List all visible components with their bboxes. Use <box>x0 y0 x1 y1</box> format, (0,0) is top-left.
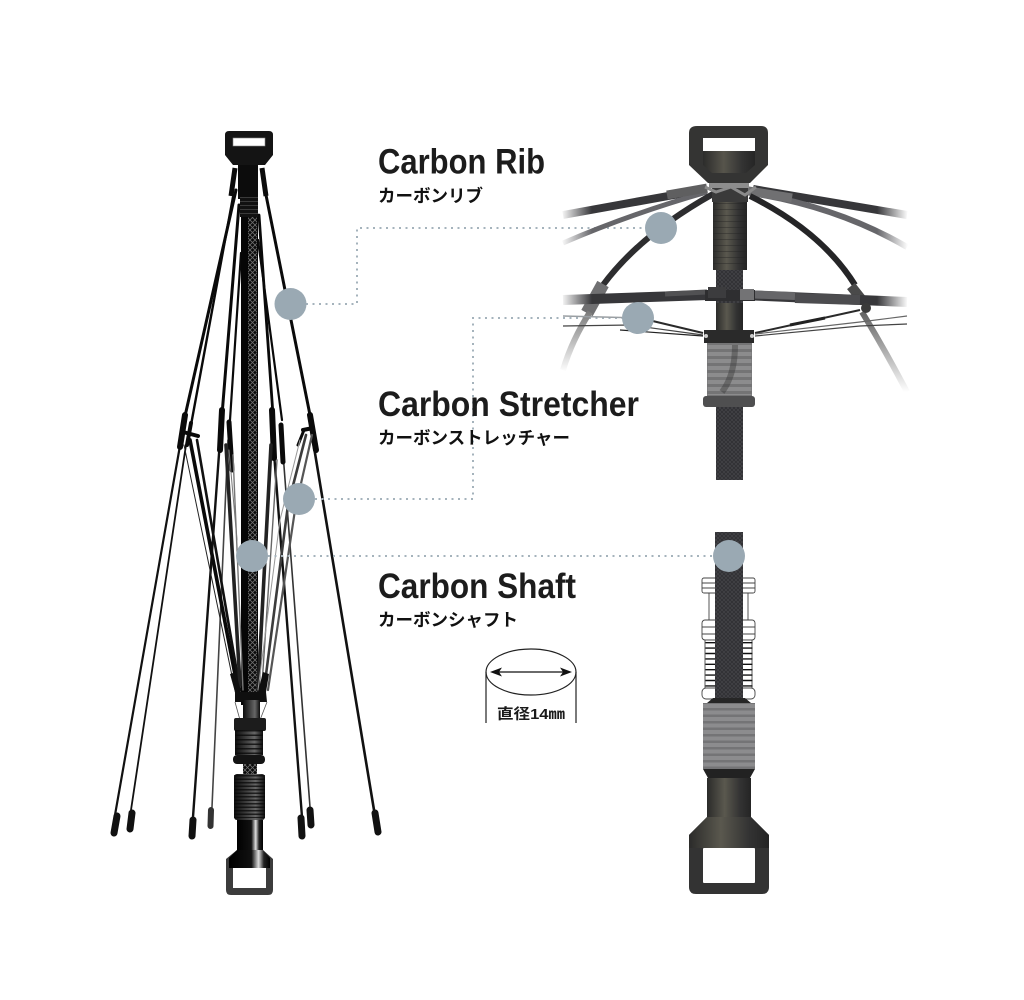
shaft <box>241 215 258 705</box>
subheading: Carbon Rib Japanese: カーボンリブ <box>378 186 483 206</box>
middle collar <box>705 287 755 331</box>
top loop <box>225 131 273 165</box>
top ferrule <box>705 187 756 270</box>
thin stretchers <box>563 303 907 336</box>
full umbrella frame illustration <box>114 131 378 895</box>
close-up: upper frame <box>563 126 907 480</box>
lower ferrule <box>703 330 755 407</box>
handle ferrules <box>233 718 266 852</box>
wireframe ferrule <box>702 578 755 699</box>
rib tips <box>114 810 378 836</box>
arch ribs <box>563 194 907 392</box>
close-up: handle <box>689 532 769 894</box>
marker: stretcher close-up <box>622 302 654 334</box>
marker: shaft close-up <box>713 540 745 572</box>
marker: left rib <box>274 288 306 320</box>
rib joints <box>180 410 316 470</box>
top loop <box>689 126 768 188</box>
shaft segment <box>715 532 743 699</box>
upper ribs <box>183 190 311 425</box>
subheading: Carbon Stretcher Japanese: カーボンストレッチャー <box>378 428 570 448</box>
horizontal rib bars <box>563 292 907 302</box>
diameter label: 直径14㎜ <box>497 705 566 723</box>
top notch and ferrule <box>231 165 266 217</box>
connector: carbon rib <box>306 228 647 304</box>
shaft close-up <box>716 260 743 480</box>
neck <box>707 778 751 818</box>
marker: left stretcher <box>283 483 315 515</box>
marker: left shaft <box>236 540 268 572</box>
heading: Carbon Shaft: Carbon Shaft <box>378 567 576 606</box>
connector: carbon stretcher <box>315 318 624 499</box>
grip <box>703 698 755 778</box>
diameter diagram <box>486 649 576 723</box>
bottom loop <box>226 850 273 895</box>
connector: carbon shaft <box>268 555 715 557</box>
lower ribs <box>115 435 374 817</box>
subheading: Carbon Shaft Japanese: カーボンシャフト <box>378 610 518 630</box>
runner <box>230 672 269 720</box>
heading: Carbon Stretcher: Carbon Stretcher <box>378 385 639 424</box>
marker: rib close-up <box>645 212 677 244</box>
upper ribs close-up <box>563 188 907 247</box>
stretchers <box>184 435 312 695</box>
heading: Carbon Rib: Carbon Rib <box>378 142 545 182</box>
bottom loop <box>689 817 769 894</box>
